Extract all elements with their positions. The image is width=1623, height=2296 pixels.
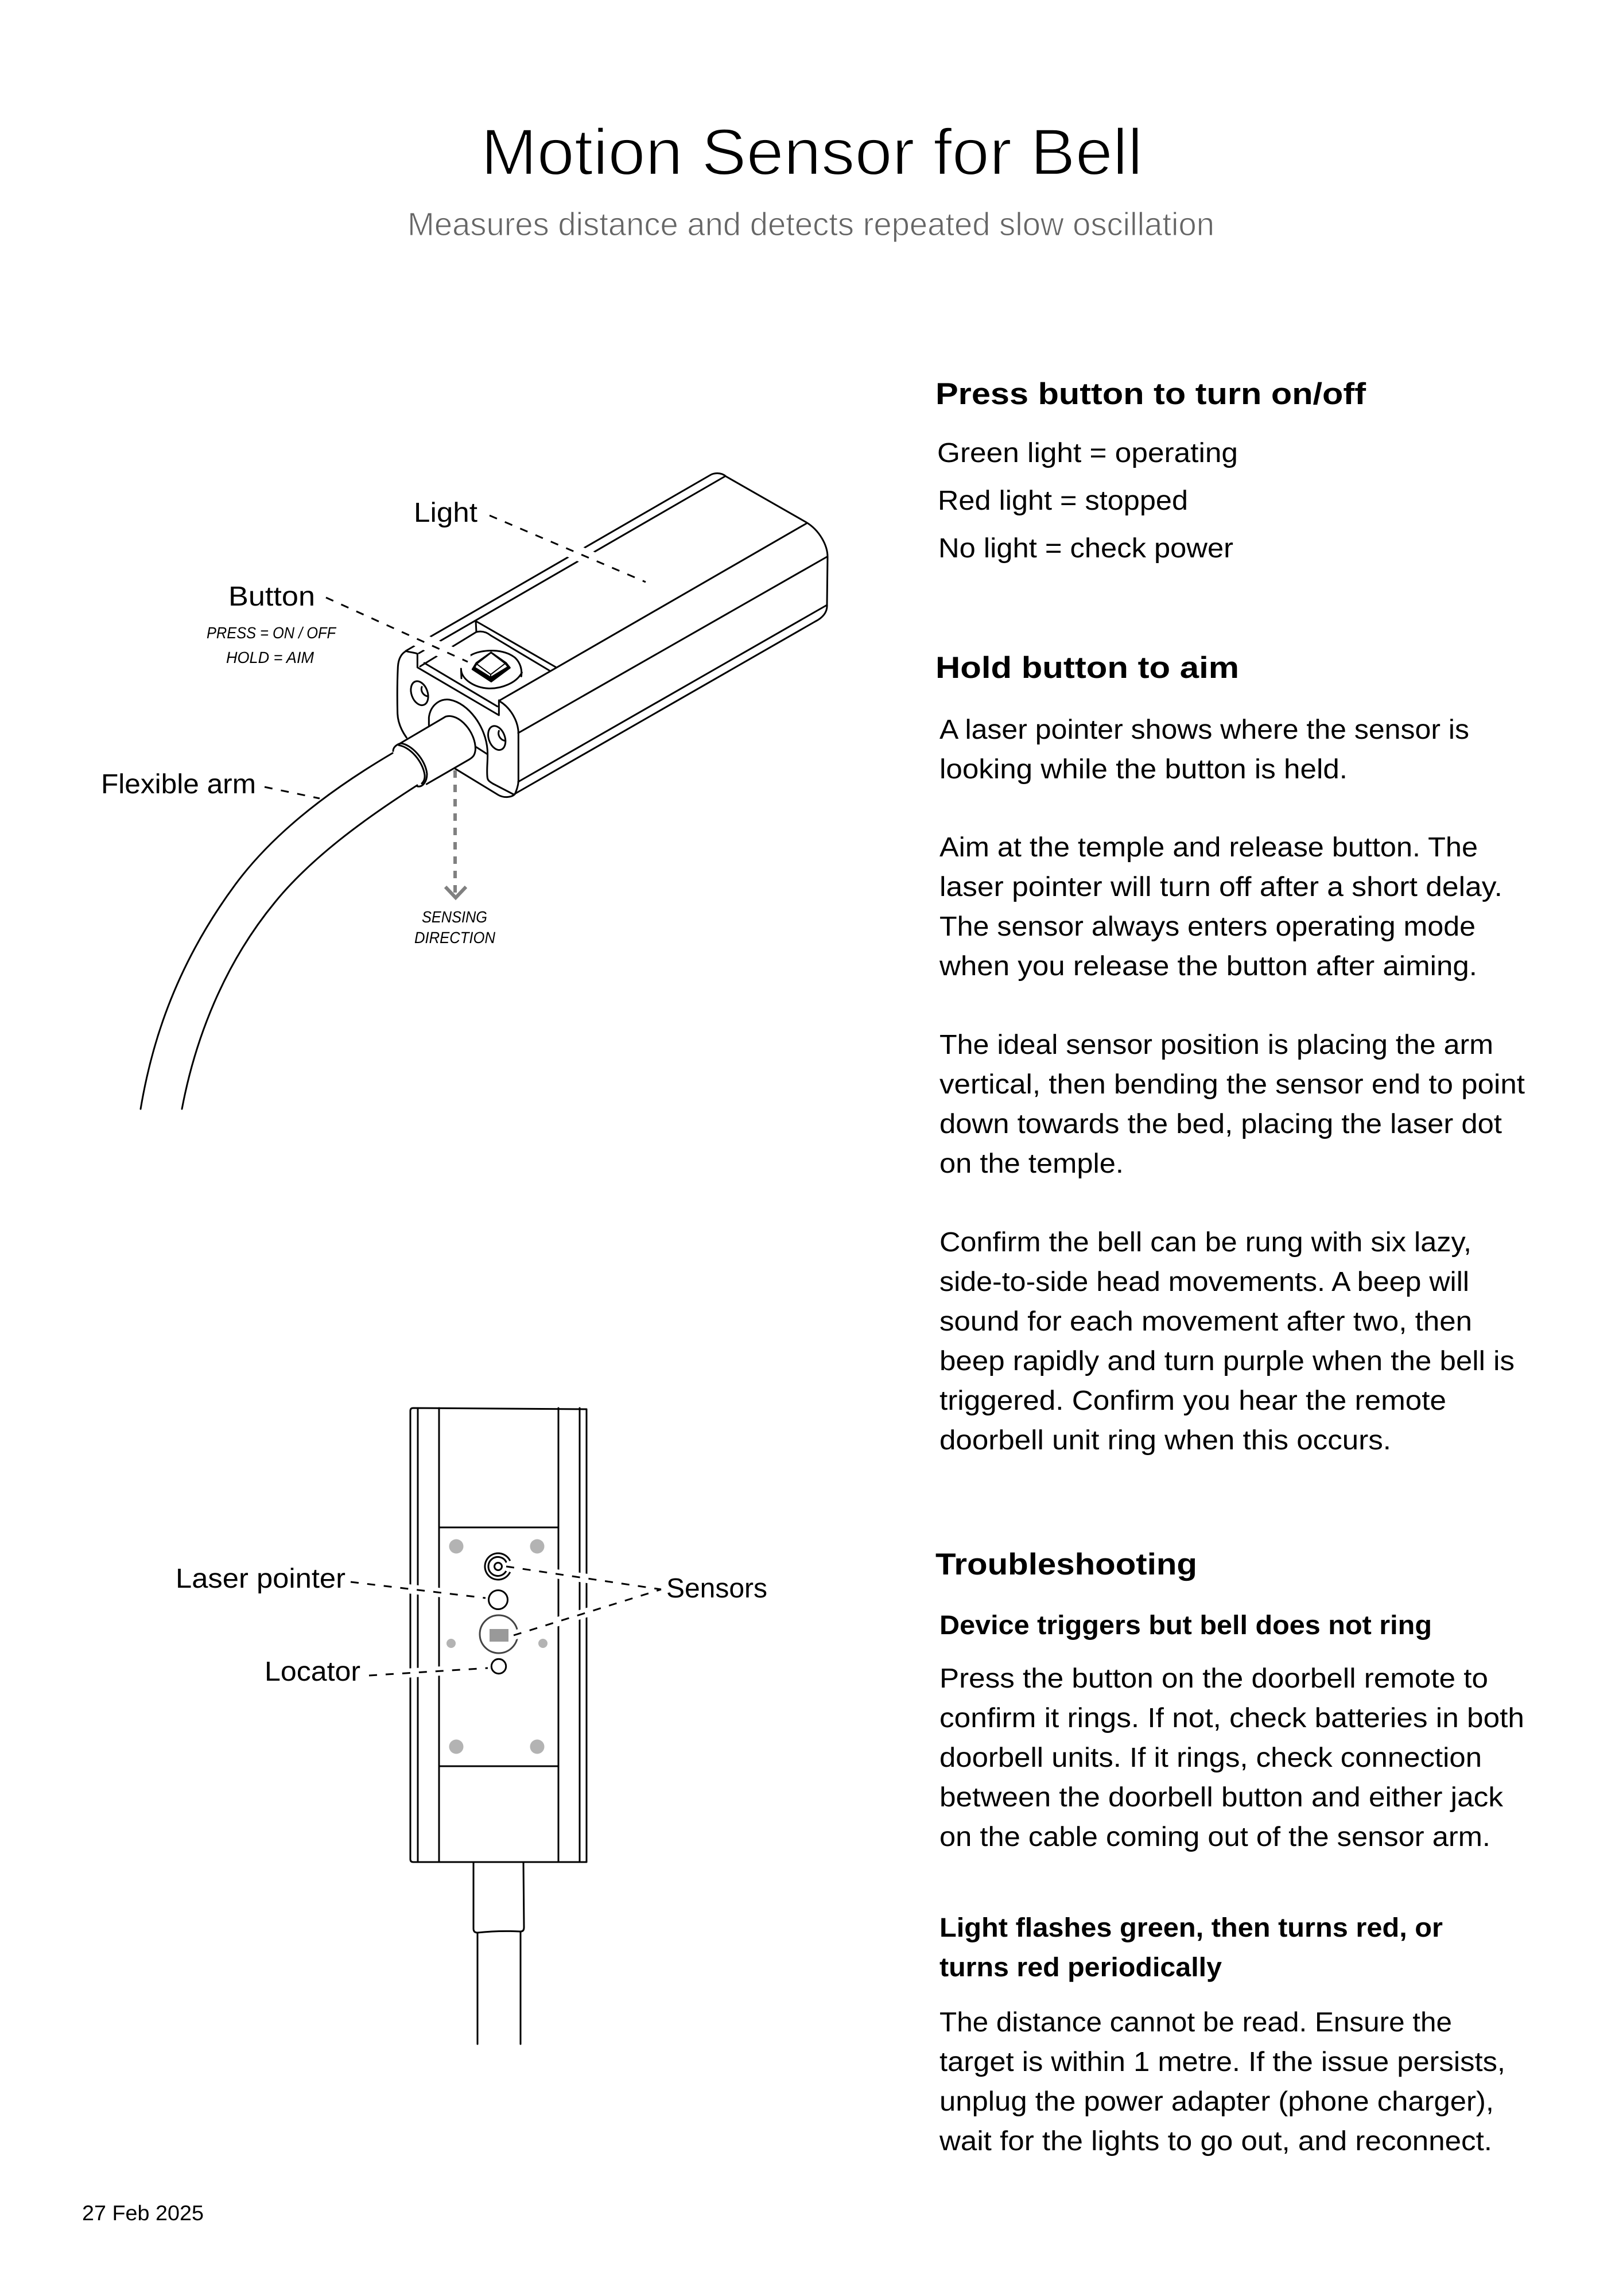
sensing direction arrow bbox=[445, 770, 466, 898]
text: device triggers fix: on the cable coming out of the sensor arm. bbox=[939, 1822, 1490, 1852]
diagram: angled view of sensor with flexible arm bbox=[141, 473, 828, 1109]
sensor housing bbox=[410, 1408, 587, 1862]
text: aiming bbox=[939, 832, 1502, 982]
label: sensing direction bbox=[414, 908, 496, 947]
subheading: light flashes: turns red periodically bbox=[939, 1952, 1222, 1982]
text: ideal position: vertical, then bending the sensor end to point bbox=[939, 1069, 1525, 1100]
text: device triggers fix: between the doorbell button and either jack bbox=[939, 1782, 1504, 1813]
heading: hold button: Hold button to aim bbox=[935, 651, 1239, 685]
heading: press button: Press button to turn on/off bbox=[935, 377, 1366, 411]
text: laser pointer: A laser pointer shows where the sensor is bbox=[939, 715, 1469, 745]
light status list: No light = check power bbox=[938, 533, 1233, 564]
text: aiming: The sensor always enters operating mode bbox=[939, 912, 1476, 942]
label: button: Button bbox=[228, 581, 315, 612]
text: confirm bell: triggered. Confirm you hear the remote bbox=[939, 1386, 1446, 1416]
text: aiming: laser pointer will turn off after a short delay. bbox=[939, 872, 1502, 902]
sensor: concentric emitter bbox=[485, 1553, 510, 1580]
text: confirm bell: side-to-side head movements. A beep will bbox=[939, 1267, 1469, 1297]
text: confirm bell bbox=[939, 1227, 1515, 1456]
leader: laser pointer bbox=[351, 1582, 486, 1598]
text: light flashes fix bbox=[939, 2007, 1505, 2157]
label: locator: Locator bbox=[265, 1657, 360, 1687]
subheading: device triggers: Device triggers but bell does not ring bbox=[939, 1609, 1432, 1640]
subheading: light flashes: Light flashes green, then turns red, or bbox=[939, 1912, 1443, 1942]
leader: light bbox=[490, 515, 646, 582]
label: laser pointer: Laser pointer bbox=[176, 1564, 345, 1594]
text: confirm bell: doorbell unit ring when this occurs. bbox=[939, 1425, 1391, 1456]
text: device triggers fix: doorbell units. If it rings, check connection bbox=[939, 1743, 1482, 1773]
locator bbox=[491, 1659, 506, 1674]
text: light flashes fix: target is within 1 metre. If the issue persists, bbox=[939, 2047, 1505, 2077]
text: laser pointer bbox=[939, 715, 1469, 785]
faceplate and sleeve bbox=[393, 650, 522, 797]
text: light flashes fix: unplug the power adapter (phone charger), bbox=[939, 2086, 1494, 2117]
text: aiming: when you release the button after aiming. bbox=[939, 951, 1477, 982]
sensor: lens with window bbox=[480, 1615, 518, 1653]
label: flexible arm: Flexible arm bbox=[101, 769, 256, 800]
subheading: light flashes bbox=[939, 1912, 1443, 1982]
arm sleeve and cable bbox=[473, 1862, 524, 2044]
light status list: Green light = operating bbox=[937, 438, 1238, 468]
text: ideal position: down towards the bed, placing the laser dot bbox=[939, 1109, 1502, 1139]
text: light flashes fix: wait for the lights to go out, and reconnect. bbox=[939, 2126, 1492, 2157]
note: button actions bbox=[207, 624, 337, 666]
text: confirm bell: beep rapidly and turn purple when the bell is bbox=[939, 1346, 1515, 1376]
laser pointer aperture bbox=[489, 1590, 507, 1609]
label: sensing direction: SENSING bbox=[422, 908, 487, 926]
subtitle: Measures distance and detects repeated slow oscillation bbox=[407, 206, 1214, 243]
leader: button bbox=[326, 598, 468, 662]
sensor body bbox=[406, 473, 828, 794]
light status list bbox=[937, 438, 1238, 564]
flexible arm bbox=[141, 753, 417, 1109]
note: button actions: PRESS = ON / OFF bbox=[207, 624, 337, 642]
title: Motion Sensor for Bell bbox=[481, 116, 1143, 189]
text: device triggers fix: Press the button on the doorbell remote to bbox=[939, 1663, 1488, 1694]
label: light: Light bbox=[414, 498, 477, 528]
text: light flashes fix: The distance cannot be read. Ensure the bbox=[939, 2007, 1452, 2038]
heading: troubleshooting: Troubleshooting bbox=[935, 1548, 1197, 1581]
text: device triggers fix: confirm it rings. If not, check batteries in both bbox=[939, 1703, 1524, 1733]
text: ideal position: on the temple. bbox=[939, 1149, 1124, 1179]
light status list: Red light = stopped bbox=[938, 486, 1188, 516]
leader: locator bbox=[369, 1668, 488, 1676]
text: laser pointer: looking while the button is held. bbox=[939, 754, 1348, 785]
label: sensing direction: DIRECTION bbox=[414, 929, 496, 947]
leader: flexible arm bbox=[265, 787, 320, 798]
date: 27 Feb 2025 bbox=[82, 2201, 204, 2225]
note: button actions: HOLD = AIM bbox=[226, 649, 314, 666]
text: aiming: Aim at the temple and release button. The bbox=[939, 832, 1478, 863]
diagram: underside view of sensor bbox=[351, 1408, 661, 2044]
text: ideal position bbox=[939, 1030, 1525, 1179]
text: confirm bell: sound for each movement after two, then bbox=[939, 1306, 1472, 1337]
text: device triggers fix bbox=[939, 1663, 1524, 1852]
text: confirm bell: Confirm the bell can be rung with six lazy, bbox=[939, 1227, 1471, 1258]
label: sensors: Sensors bbox=[666, 1573, 767, 1604]
text: ideal position: The ideal sensor position is placing the arm bbox=[939, 1030, 1493, 1060]
leaders: sensors bbox=[506, 1566, 661, 1635]
mounting screws bbox=[446, 1539, 548, 1754]
